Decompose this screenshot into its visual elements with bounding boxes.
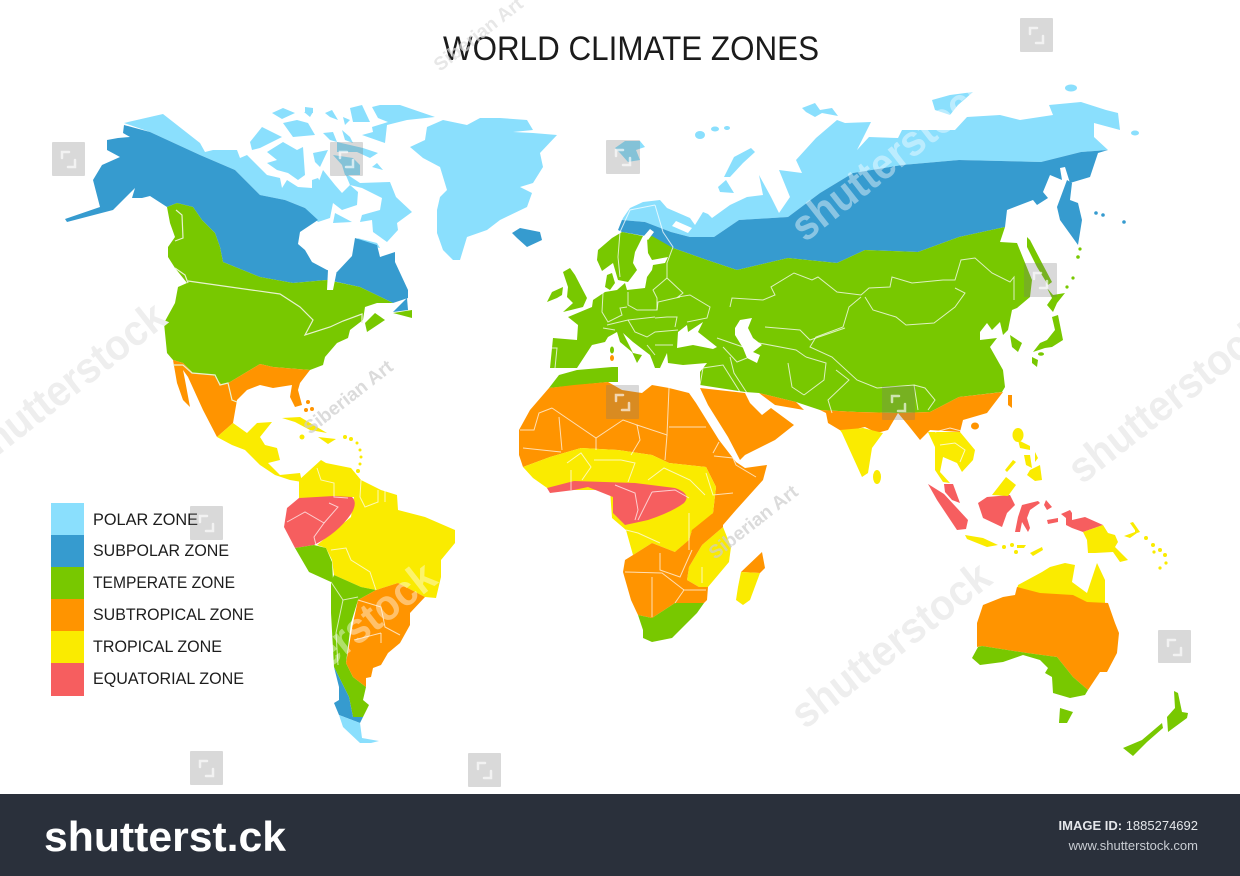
footer logo: shutterst.ck: [44, 813, 287, 860]
map: australia and new zealand: [972, 563, 1188, 756]
polar zone: arctic canada and greenland: [124, 105, 557, 260]
website: www.shutterstock.com: [1068, 838, 1198, 853]
caspian sea: [735, 318, 762, 363]
temperate zone: southern australia: [972, 646, 1088, 698]
tropical zone: northern australia: [1017, 563, 1105, 604]
legend item: subpolar zone: [51, 535, 229, 568]
equatorial zone: amazon west: [284, 496, 355, 548]
legend item: subtropical zone: [51, 599, 254, 632]
equatorial zone: congo basin: [547, 481, 687, 525]
temperate zone: north africa coast: [549, 367, 618, 388]
white bay: james bay: [327, 270, 337, 290]
tropical zone: india and indochina: [840, 428, 975, 484]
map: south america: [284, 460, 455, 743]
tropical zone: mozambique: [687, 527, 731, 587]
legend item: polar zone: POLAR ZONE: [93, 511, 198, 529]
watermark swirls on tiles and background: [62, 28, 1181, 778]
legend item: subpolar zone: SUBPOLAR ZONE: [93, 542, 229, 560]
black sea: [677, 322, 717, 349]
temperate zone: andes: [295, 545, 376, 717]
temperate zone: canada and usa: [164, 203, 412, 385]
tropical zone: amazon and brazil: [299, 460, 455, 598]
map: maritime southeast asia: [928, 428, 1168, 570]
madagascar: [736, 552, 765, 605]
legend item: temperate zone: [51, 567, 235, 600]
africa borders: [520, 388, 756, 617]
subpolar zone: kuril dots: [1094, 211, 1126, 224]
legend item: tropical zone: TROPICAL ZONE: [93, 638, 222, 656]
watermark text: Siberian Art: [705, 481, 803, 564]
map: north america: [65, 105, 557, 482]
legend item: subtropical zone: SUBTROPICAL ZONE: [93, 606, 254, 624]
image id: IMAGE ID: 1885274692: [1059, 818, 1198, 833]
subtropical zone: sahara and east africa: [519, 382, 767, 537]
temperate zone: south africa: [638, 603, 704, 642]
polar zone: arctic russia: [615, 84, 1139, 237]
watermark text: Siberian Art: [300, 356, 398, 439]
subtropical: bahamas dots: [304, 400, 314, 412]
subtropical zone: central australia: [977, 587, 1119, 690]
equatorial zone: indonesia: [928, 484, 1103, 532]
watermark text: shutterstock: [782, 65, 1000, 251]
temperate zone: europe and asia: [547, 227, 1082, 413]
new zealand: [1123, 691, 1188, 756]
legend item: temperate zone: TEMPERATE ZONE: [93, 574, 235, 592]
title: WORLD CLIMATE ZONES: [443, 30, 819, 68]
watermark text: shutterstock: [227, 552, 445, 738]
subtropical zone: east strip and southern africa: [623, 517, 723, 618]
legend item: equatorial zone: EQUATORIAL ZONE: [93, 670, 244, 688]
tasmania: [1059, 708, 1073, 723]
map: eurasia: [547, 84, 1139, 484]
legend item: tropical zone: [51, 631, 222, 664]
polar zone: tierra del fuego: [339, 715, 379, 743]
subpolar zone: kamchatka: [1057, 180, 1082, 245]
south america borders: [287, 468, 400, 665]
tropical zone: central america and caribbean: [217, 417, 362, 482]
tropical zone: islands and new guinea: [965, 428, 1168, 570]
subtropical zone: arabia, south asia: [610, 355, 1012, 460]
footer bar: [0, 794, 1240, 876]
subpolar zone: siberia: [618, 150, 1108, 270]
legend item: polar zone: [51, 503, 198, 536]
subpolar zone: patagonia: [334, 667, 363, 723]
baltic tip: [643, 229, 654, 240]
inland seas: [643, 221, 762, 363]
map: africa: [519, 367, 767, 642]
white sea: [672, 221, 692, 233]
subtropical zone: south brazil and argentina: [346, 583, 425, 687]
tropical zone: sahel and central africa: [523, 448, 716, 555]
watermark text: shutterstock: [782, 552, 1000, 738]
asia and europe borders: [552, 205, 1014, 462]
subpolar zone: alaska and canada: [65, 125, 542, 312]
legend: [51, 503, 254, 696]
subtropical zone: mexico and gulf coast: [173, 360, 310, 437]
us and mexico borders: [173, 210, 362, 402]
legend item: equatorial zone: [51, 663, 244, 696]
